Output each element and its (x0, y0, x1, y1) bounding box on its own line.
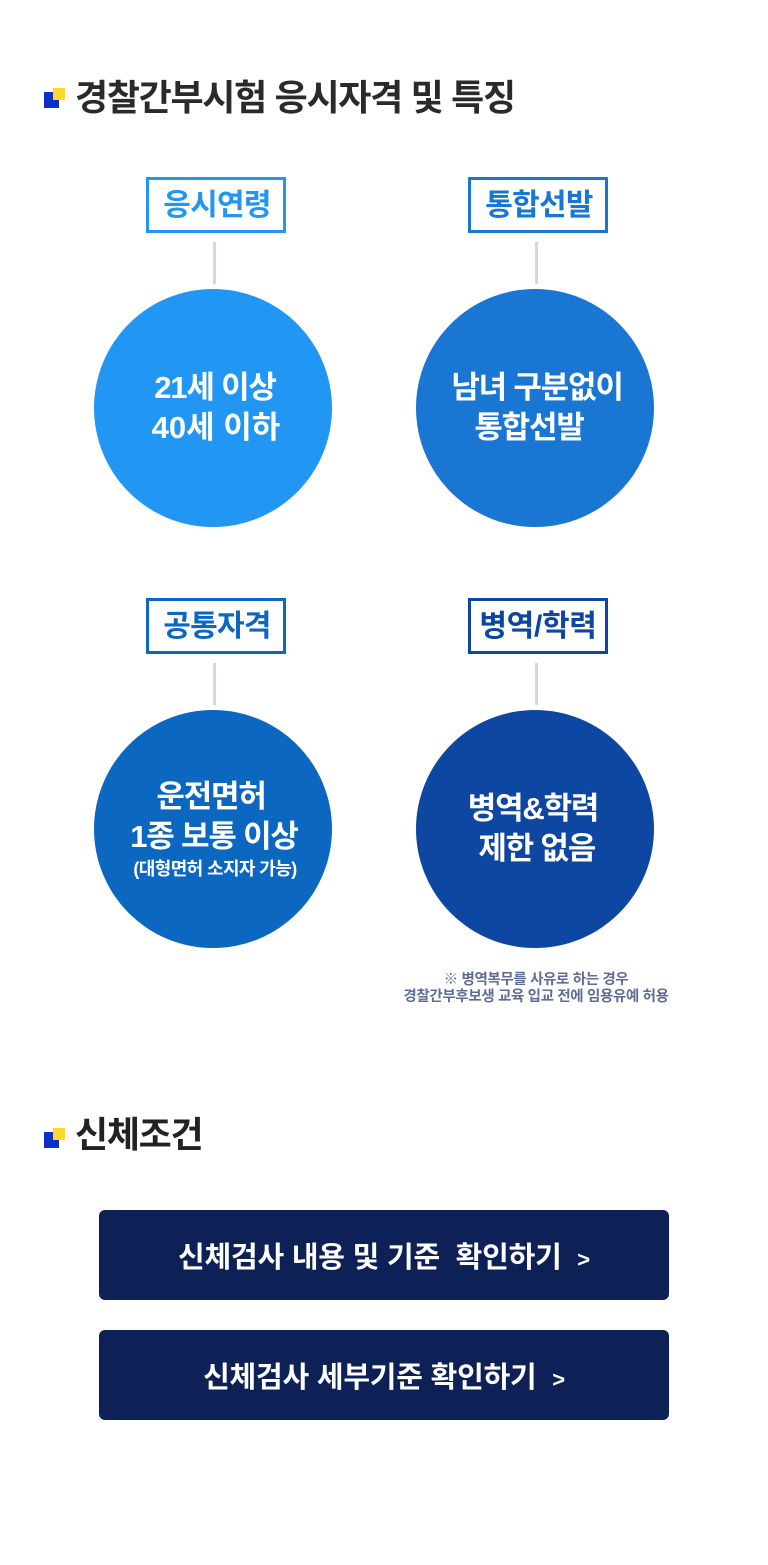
label: integrated selection: 통합선발 (485, 189, 593, 222)
footnote (403, 971, 669, 1005)
button: exam content and criteria: 신체검사 내용 및 기준 확인하기 > (178, 1242, 590, 1274)
circle: age (94, 289, 332, 527)
footnote: ※ 병역복무를 사유로 하는 경우 (444, 972, 628, 988)
panel: age (94, 177, 332, 527)
connector (535, 242, 538, 284)
connector (213, 663, 216, 705)
panel: common qualification (94, 598, 332, 948)
circle: integrated selection (416, 289, 654, 527)
connector (213, 242, 216, 284)
circle: age: 21세 이상 (154, 370, 276, 405)
heading: exam eligibility: 경찰간부시험 응시자격 및 특징 (75, 77, 515, 118)
icon: heading marker 2 (44, 1128, 65, 1148)
circle: common qualification (94, 710, 332, 948)
label: military and education (468, 598, 608, 654)
button: exam content and criteria (99, 1210, 669, 1300)
circle: integrated selection: 통합선발 (474, 410, 584, 445)
panel: military and education (416, 598, 654, 948)
circle: age: 40세 이하 (152, 410, 280, 445)
label: integrated selection (468, 177, 608, 233)
note: license: (대형면허 소지자 가능) (133, 859, 297, 879)
label: age: 응시연령 (163, 189, 271, 222)
circle: military and education: 제한 없음 (478, 831, 595, 866)
label: common qualification: 공통자격 (163, 610, 271, 643)
circle: common qualification: 운전면허 (156, 779, 266, 814)
circle: integrated selection: 남녀 구분없이 (451, 370, 623, 405)
label: military and education: 병역/학력 (479, 610, 597, 643)
panel: integrated selection (416, 177, 654, 527)
circle: military and education (416, 710, 654, 948)
label: age (146, 177, 286, 233)
connector (535, 663, 538, 705)
icon: heading marker 1 (44, 88, 65, 108)
label: common qualification (146, 598, 286, 654)
heading: physical requirements: 신체조건 (75, 1114, 202, 1155)
footnote: 경찰간부후보생 교육 입교 전에 임용유예 허용 (403, 989, 669, 1005)
circle: common qualification: 1종 보통 이상 (130, 819, 298, 854)
button: detailed criteria: 신체검사 세부기준 확인하기 > (203, 1362, 565, 1394)
circle: military and education: 병역&학력 (468, 791, 598, 826)
button: detailed criteria (99, 1330, 669, 1420)
